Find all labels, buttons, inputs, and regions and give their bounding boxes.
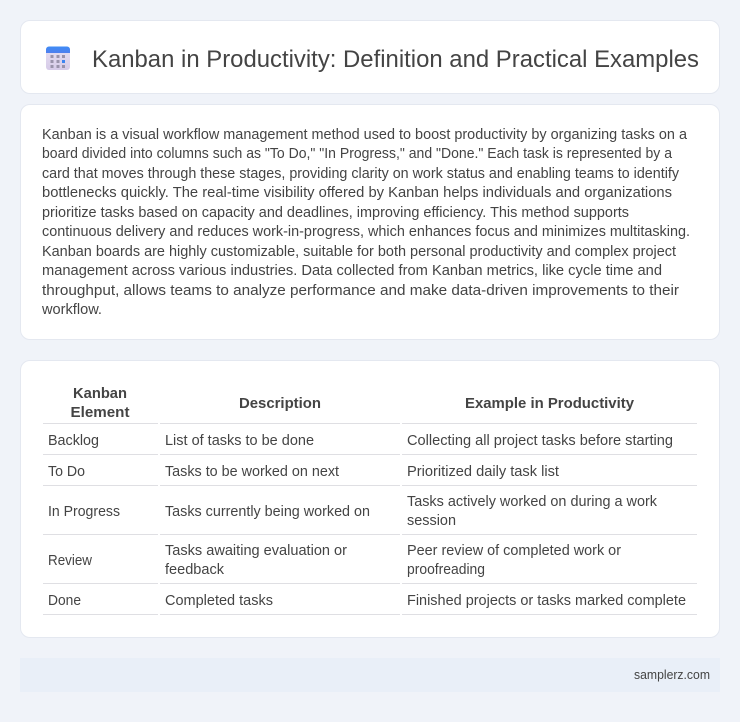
row: to do [48, 464, 559, 480]
row: in progress: Tasks actively worked on during a work [407, 494, 658, 510]
row: backlog [48, 433, 673, 449]
row: in progress: In Progress [48, 504, 120, 520]
table rules [43, 423, 697, 615]
table header [70, 385, 635, 421]
row: backlog: Collecting all project tasks before starting [407, 433, 673, 449]
row: backlog: Backlog [48, 433, 99, 449]
row: to do: Prioritized daily task list [407, 464, 559, 480]
intro text: continuous delivery and reduces work-in-progress, which enhances focus and minimizes multitasking. [42, 224, 690, 240]
row: done [48, 593, 686, 609]
intro text: bottlenecks quickly. The real-time visibility offered by Kanban helps individuals and organizations [42, 185, 672, 201]
intro text: board divided into columns such as "To Do," "In Progress," and "Done." Each task is represented by a [42, 146, 673, 162]
row: in progress: session [407, 513, 456, 529]
row: review [48, 543, 621, 578]
row: review: feedback [165, 562, 225, 578]
intro text [41, 127, 690, 318]
table header: Element [70, 404, 130, 421]
row: review: Review [48, 553, 92, 569]
icon: calendar [46, 46, 70, 70]
intro text: card that moves through these stages, providing clarity on work status and enabling teams to identify [42, 166, 680, 182]
row: backlog: List of tasks to be done [165, 433, 314, 449]
table [43, 385, 697, 615]
intro text: management across various industries. Data collected from Kanban metrics, like cycle time and [42, 263, 662, 279]
row: in progress: Tasks currently being worked on [165, 504, 370, 520]
intro text: workflow. [41, 302, 102, 318]
row: review: Peer review of completed work or [407, 543, 621, 559]
header panel [20, 20, 720, 94]
footer bar [20, 658, 720, 692]
row: in progress [48, 494, 658, 529]
row: to do: To Do [48, 464, 85, 480]
title: Kanban in Productivity: Definition and Practical Examples [92, 46, 699, 73]
table header: Example in Productivity [465, 395, 635, 412]
intro text: Kanban is a visual workflow management method used to boost productivity by organizing tasks on a [42, 127, 688, 143]
intro panel [20, 104, 720, 340]
row: review: proofreading [407, 562, 485, 578]
table panel [20, 360, 720, 638]
row: review: Tasks awaiting evaluation or [165, 543, 347, 559]
intro text: throughput, allows teams to analyze performance and make data-driven improvements to their [42, 283, 679, 299]
row: done: Done [48, 593, 81, 609]
table header: Kanban [73, 385, 127, 402]
row: done: Finished projects or tasks marked complete [407, 593, 686, 609]
row: to do: Tasks to be worked on next [165, 464, 339, 480]
row: done: Completed tasks [165, 593, 273, 609]
table header: Description [239, 395, 321, 412]
intro text: Kanban boards are highly customizable, suitable for both personal productivity and complex project [42, 244, 676, 260]
footer text: samplerz.com [634, 668, 710, 682]
intro text: prioritize tasks based on capacity and deadlines, improving efficiency. This method supports [42, 205, 629, 221]
